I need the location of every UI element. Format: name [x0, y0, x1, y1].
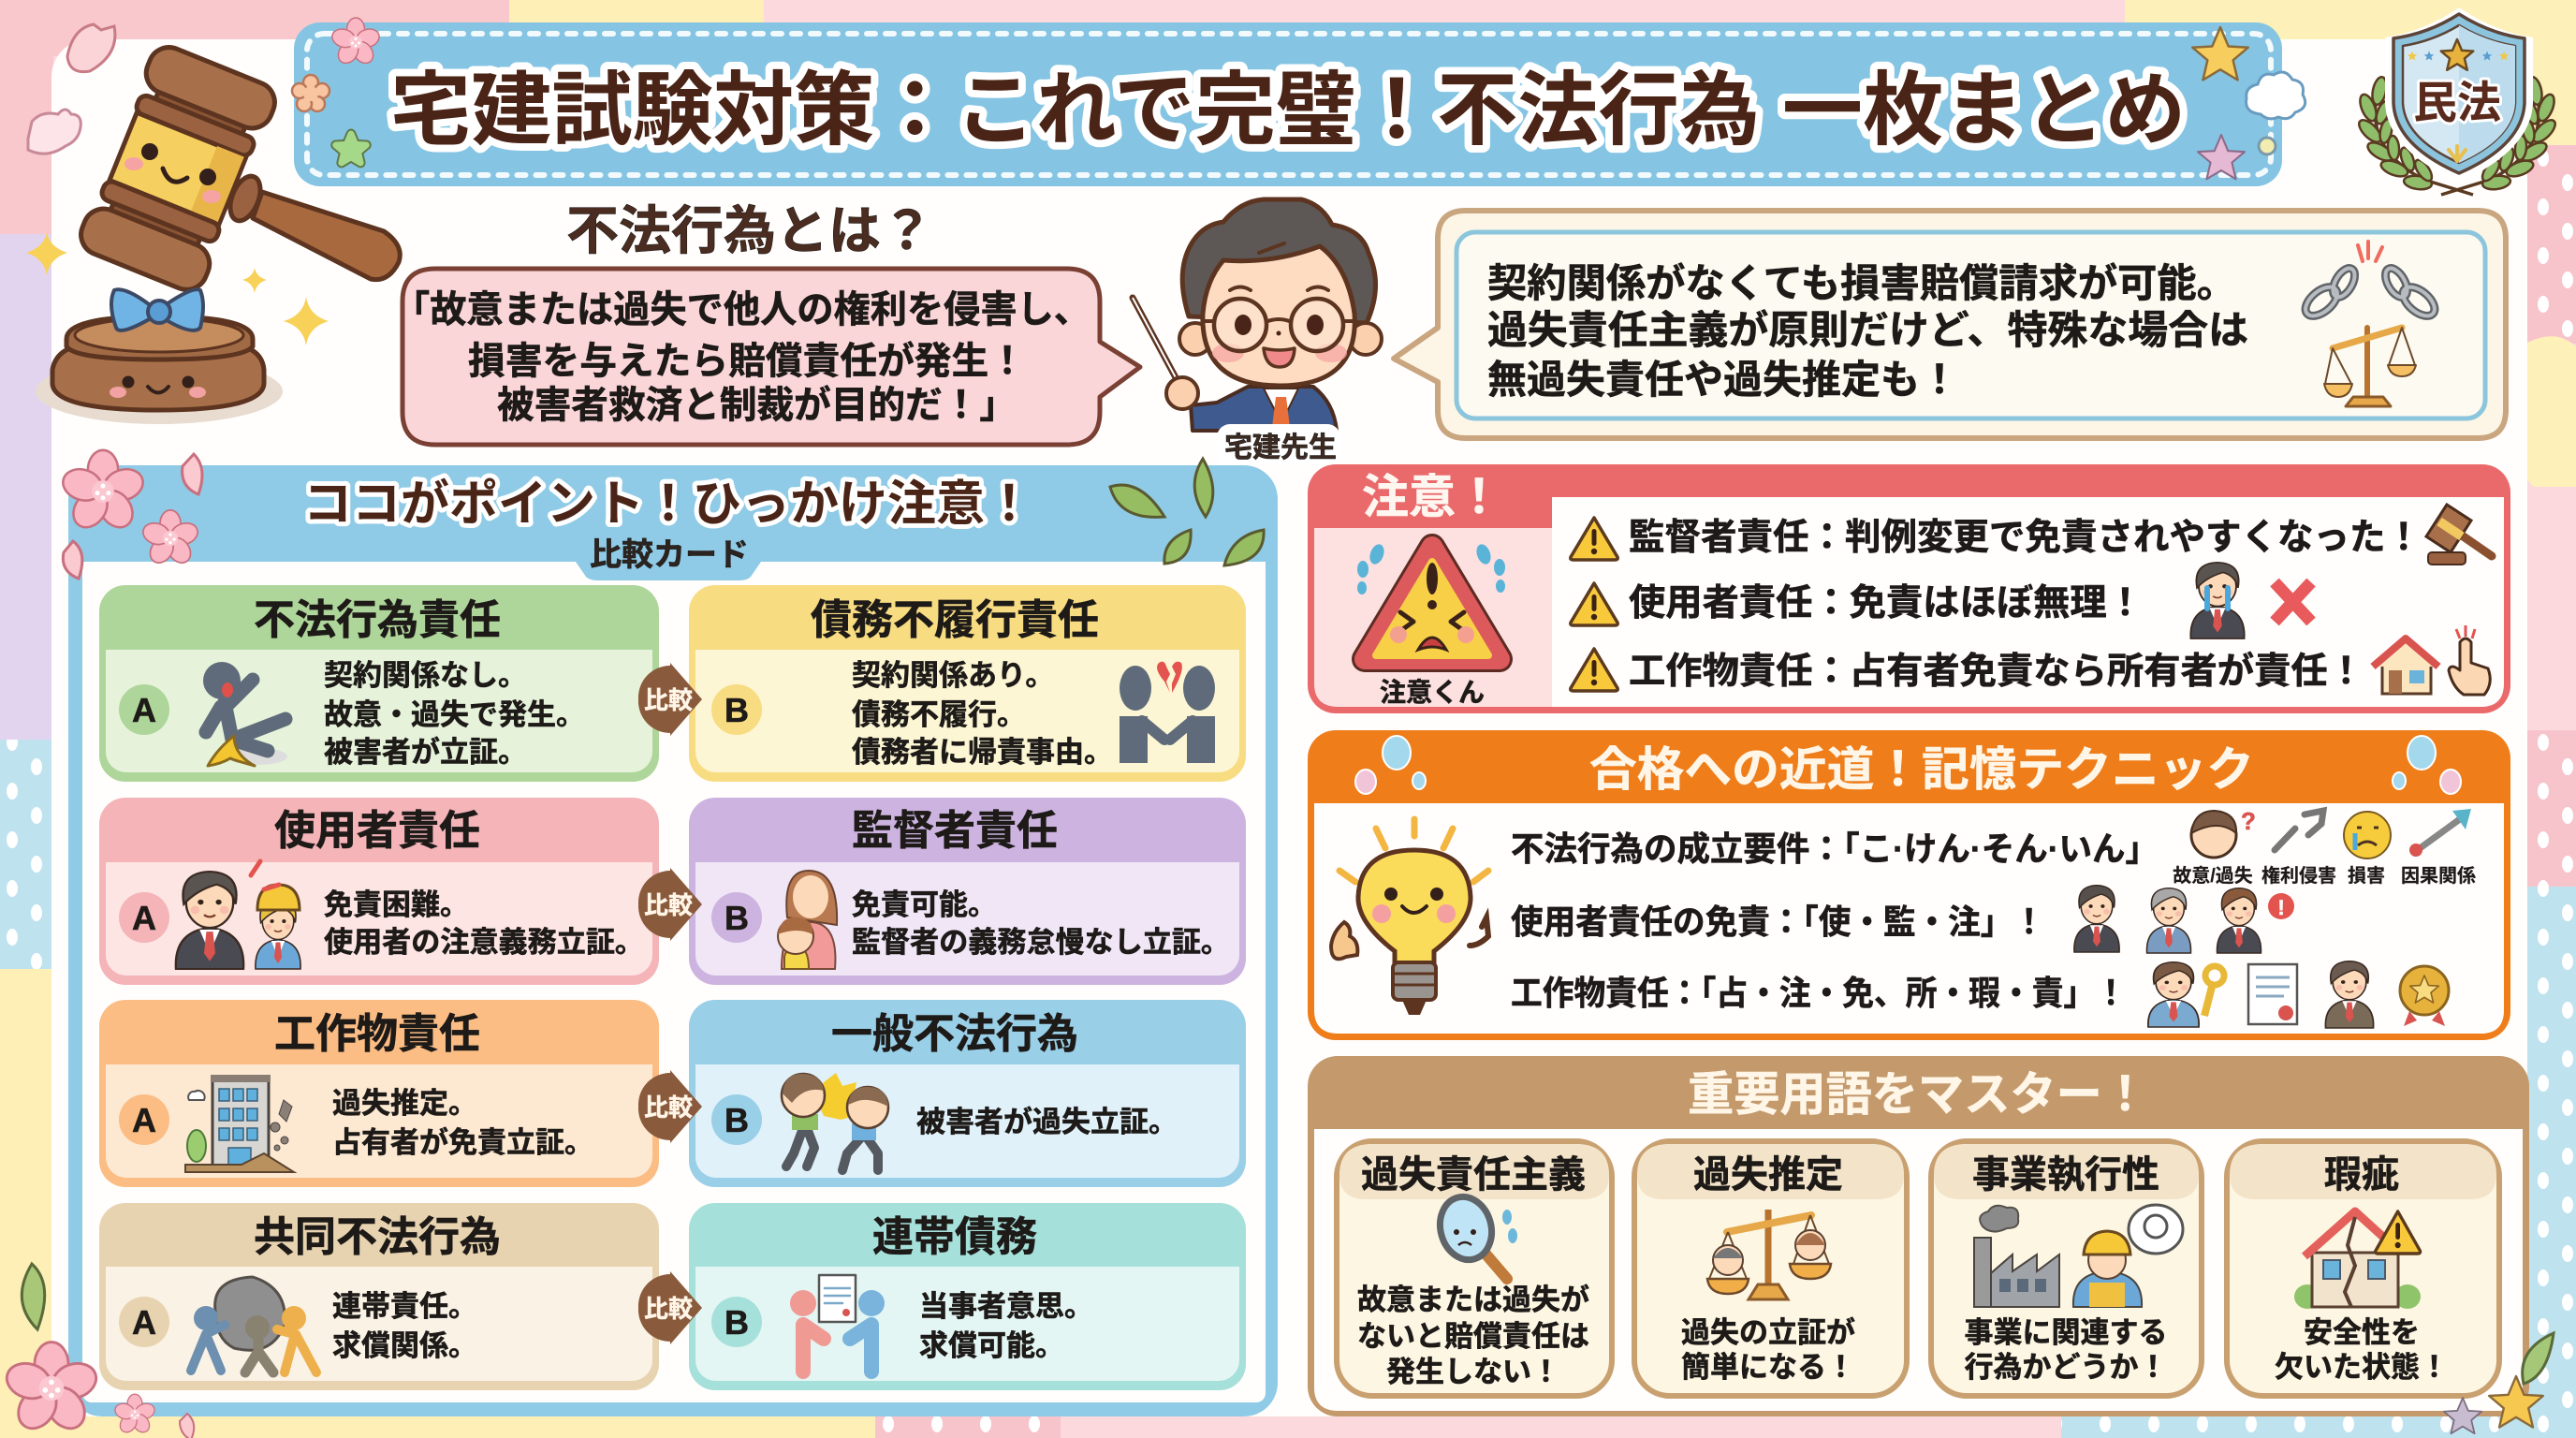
card: 不法行為責任: [99, 585, 659, 782]
badge B: B: [724, 899, 749, 937]
icon: house: [2373, 638, 2438, 694]
card: 不法行為責任: 不法行為責任: [254, 597, 501, 643]
arrow: 比較 row 2: 比較: [644, 891, 693, 919]
text: 免責困難。: [324, 888, 469, 921]
icon: crying man: [2190, 563, 2245, 638]
mnemonic 3: [1511, 961, 2449, 1028]
icon: collapsing building: [185, 1075, 294, 1172]
badge B: [711, 1094, 762, 1145]
card: 連帯債務: 連帯債務: [872, 1214, 1037, 1260]
icon: people pushing boulder: [191, 1277, 316, 1372]
panel: 記憶テクニック: [1308, 730, 2510, 1040]
character name: [1217, 424, 1340, 464]
icon: pointing hand: [2449, 625, 2490, 695]
icon row with labels: 因果関係: [2401, 865, 2476, 887]
badge A: A: [132, 1101, 156, 1139]
badge B: B: [724, 691, 749, 729]
icons: three people: !: [2277, 896, 2285, 919]
badge A: [119, 892, 169, 943]
speech bubble: explanation: [1394, 211, 2506, 438]
title banner: [294, 22, 2282, 186]
speech bubble: explanation: 無過失責任や過失推定も！: [1487, 358, 1959, 402]
text: [852, 659, 1113, 769]
mascot: light bulb: [1331, 819, 1488, 1015]
text: 過失推定。: [332, 1087, 477, 1120]
term card: 過失推定: 過失の立証が: [1681, 1316, 1855, 1349]
card: 監督者責任: [689, 798, 1246, 985]
card: 使用者責任: [99, 798, 659, 985]
badge A: A: [132, 691, 156, 729]
badge A: [119, 1297, 169, 1347]
text: [332, 1290, 477, 1362]
icon row with labels: [2173, 807, 2476, 887]
badge A: [119, 1094, 169, 1145]
icon: broken chain and scales: [2301, 242, 2439, 406]
section title: 不法行為とは: 不法行為とは？: [566, 201, 933, 260]
text: 求償関係。: [332, 1329, 477, 1362]
icon row with labels: 権利侵害: [2261, 864, 2336, 887]
card: 債務不履行責任: 債務不履行責任: [811, 597, 1099, 643]
card: 工作物責任: [99, 1000, 659, 1187]
heading: 合格への近道！記憶テクニック: [1589, 743, 2254, 796]
text: 被害者が過失立証。: [916, 1106, 1178, 1138]
speech bubble: definition: 被害者救済と制裁が目的だ！」: [497, 385, 1017, 426]
term card: 事業執行性: [1931, 1141, 2202, 1396]
bottom right decorations: [2444, 1333, 2554, 1433]
text: [852, 888, 1230, 959]
icon: small gavel: [2426, 505, 2492, 565]
corner petals: [28, 24, 115, 154]
title text: 宅建試験対策：これで完璧！不法行為 一枚まとめ: [390, 66, 2186, 155]
heading: 注意！: [1362, 471, 1502, 523]
speech bubble: definition: 損害を与えたら賠償責任が発生！: [468, 341, 1026, 382]
card: 共同不法行為: 共同不法行為: [254, 1214, 501, 1260]
speech bubble: explanation: 過失責任主義が原則だけど、特殊な場合は: [1487, 308, 2248, 352]
text: 債務者に帰責事由。: [852, 736, 1113, 769]
arrow: 比較 row 4: 比較: [644, 1295, 693, 1323]
card: 債務不履行責任: [689, 585, 1246, 782]
arrow: 比較 row 3: 比較: [644, 1093, 693, 1122]
term card: 過失推定: 過失推定: [1693, 1154, 1843, 1196]
icon row with labels: 損害: [2348, 865, 2385, 887]
text: 債務不履行。: [852, 698, 1026, 731]
icon row with labels: 故意/過失: [2173, 865, 2253, 887]
term card: 過失責任主義: 故意または過失が: [1357, 1284, 1589, 1316]
icon: two people with contract: [790, 1275, 885, 1372]
card: 連帯債務: [689, 1203, 1246, 1390]
icon: gavel mascot: [26, 41, 400, 424]
card: 監督者責任: 監督者責任: [852, 808, 1058, 854]
icons: key, certificate, man, medal: [2148, 961, 2449, 1028]
mascot: 注意くん: 注意くん: [1380, 678, 1485, 707]
icon: colliding people: [782, 1073, 888, 1170]
emblem: 民法 shield: 民法: [2413, 78, 2501, 127]
text: 占有者が免責立証。: [332, 1126, 593, 1159]
text: 使用者の注意義務立証。: [324, 926, 644, 959]
term card: 過失責任主義: 発生しない！: [1386, 1356, 1560, 1388]
mnemonic 2: 使用者責任の免責：「使・監・注」！: [1511, 902, 2045, 941]
warning item 1: 監督者責任：判例変更で免責されやすくなった！: [1629, 518, 2422, 558]
panel: 比較カード: [59, 450, 1278, 1416]
badge B: B: [724, 1101, 749, 1139]
arrow: 比較 row 1: 比較: [644, 686, 693, 714]
panel: 重要用語: [1308, 1056, 2529, 1416]
term card: 瑕疵: 安全性を: [2304, 1316, 2420, 1349]
icon: magnifier: [1433, 1191, 1517, 1279]
term card: 瑕疵: 瑕疵: [2324, 1154, 2399, 1196]
heading: 重要用語をマスター！: [1688, 1068, 2148, 1121]
text: 求償可能。: [919, 1329, 1064, 1362]
icon: red cross: [2275, 582, 2311, 622]
panel: 注意: [1308, 464, 2510, 713]
arrow: 比較 row 1: [638, 663, 702, 736]
icon: man slipping on banana: [203, 662, 287, 766]
warning item 3: 工作物責任：占有者免責なら所有者が責任！: [1629, 652, 2364, 692]
card: 共同不法行為: [99, 1203, 659, 1390]
term card: 過失推定: 簡単になる！: [1681, 1351, 1855, 1384]
text: [324, 659, 585, 769]
term card: 瑕疵: [2227, 1141, 2499, 1396]
arrow: 比較 row 3: [638, 1070, 702, 1143]
speech bubble: definition: 「故意または過失で他人の権利を侵害し、: [393, 289, 1090, 330]
icon: scales with people: [1707, 1210, 1831, 1299]
text: [919, 1290, 1093, 1362]
mascot: 注意くん: [1357, 542, 1505, 707]
decoration: flowers and leaves: [59, 450, 1264, 579]
term card: 事業執行性: 行為かどうか！: [1964, 1351, 2168, 1384]
character: 宅建先生: [1133, 199, 1382, 464]
icon row with labels: ?: [2241, 807, 2256, 835]
emblem: 民法 shield: [2355, 7, 2559, 195]
badge B: [711, 892, 762, 943]
badge A: A: [132, 1303, 156, 1342]
icons: three people: [2074, 886, 2294, 953]
icon: angry employer and worker: [176, 861, 300, 969]
term card: 過失責任主義: 過失責任主義: [1361, 1154, 1586, 1196]
speech bubble: explanation: 契約関係がなくても損害賠償請求が可能。: [1487, 261, 2236, 305]
speech bubble: definition: [393, 269, 1140, 445]
decoration: bubbles: [1355, 736, 2461, 794]
text: [332, 1087, 593, 1159]
text: 契約関係なし。: [324, 659, 527, 692]
text: 連帯責任。: [332, 1290, 477, 1323]
card: 一般不法行為: [689, 1000, 1246, 1187]
text: 被害者が立証。: [324, 736, 527, 769]
mnemonic 1: 不法行為の成立要件：「こ·けん·そん·いん」: [1511, 829, 2159, 868]
term card: 瑕疵: 欠いた状態！: [2275, 1351, 2449, 1384]
text: 故意・過失で発生。: [324, 698, 585, 731]
term card: 事業執行性: 事業執行性: [1972, 1154, 2159, 1196]
term card: 過失責任主義: ないと賠償責任は: [1357, 1320, 1589, 1353]
warning item 2: 使用者責任：免責はほぼ無理！: [1629, 583, 2144, 624]
icon: broken deal: [1120, 662, 1215, 763]
card: 工作物責任: 工作物責任: [274, 1011, 480, 1057]
badge A: [119, 684, 169, 735]
badge B: B: [724, 1303, 749, 1342]
card: 使用者責任: 使用者責任: [274, 808, 480, 854]
badge B: [711, 1297, 762, 1347]
icon: factory and worker: [1974, 1205, 2183, 1307]
card: 一般不法行為: 一般不法行為: [831, 1011, 1078, 1057]
arrow: 比較 row 2: [638, 868, 702, 941]
text: [324, 888, 644, 959]
text: 免責可能。: [852, 888, 997, 921]
panel heading: ココがポイント！ひっかけ注意！: [303, 477, 1033, 532]
text: 当事者意思。: [919, 1290, 1093, 1323]
arrow: 比較 row 4: [638, 1271, 702, 1344]
character name: 宅建先生: [1224, 433, 1337, 463]
mnemonic 3: 工作物責任：「占・注・免、所・瑕・責」！: [1511, 974, 2127, 1012]
title decorations: [292, 18, 2305, 179]
sub heading: 比較カード: [590, 537, 749, 573]
mnemonic 1: [1511, 807, 2476, 887]
badge A: A: [132, 899, 156, 937]
term card: 過失責任主義: [1337, 1141, 1612, 1396]
term card: 事業執行性: 事業に関連する: [1964, 1316, 2168, 1349]
badge B: [711, 684, 762, 735]
icon: cracked house with warning: [2294, 1211, 2421, 1309]
text: 監督者の義務怠慢なし立証。: [852, 926, 1230, 959]
bottom left flowers: [2, 1264, 194, 1438]
mnemonic 2: [1511, 886, 2294, 953]
icon: mother and child: [778, 871, 837, 969]
term card: 過失推定: [1634, 1141, 1907, 1396]
text: 契約関係あり。: [852, 659, 1054, 692]
